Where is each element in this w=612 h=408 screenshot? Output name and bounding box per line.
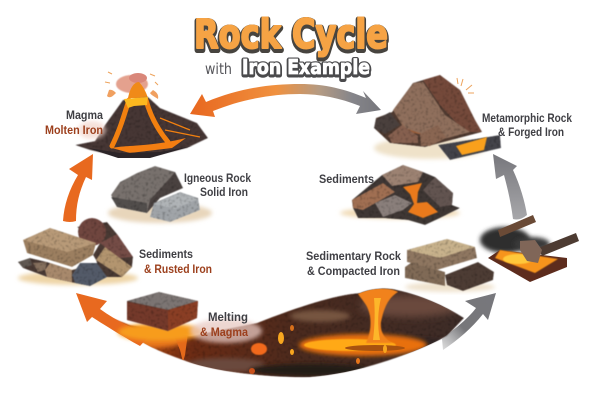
label: melting and magma — [190, 312, 262, 343]
label: magma, molten iron: Magma — [66, 110, 104, 122]
label: sediments and rusted iron — [139, 249, 212, 276]
illustration: lava mound — [112, 288, 464, 377]
illustration: metamorphic rock and forged iron — [374, 75, 501, 160]
arrow: bottom left, melting to sediments — [76, 293, 150, 346]
title: Rock Cycle — [194, 12, 388, 58]
label: metamorphic rock and forged iron: & Forged Iron — [498, 127, 564, 139]
label: igneous rock, solid iron: Solid Iron — [200, 187, 248, 199]
label: sedimentary rock and compacted iron — [306, 251, 402, 278]
illustration: igneous rock and iron ingot — [108, 166, 212, 223]
subtitle: Iron Example — [242, 56, 370, 80]
subtitle: Iron Example — [242, 55, 370, 79]
label: metamorphic rock and forged iron — [482, 113, 573, 139]
subtitle — [205, 55, 370, 80]
label: melting and magma: & Magma — [200, 327, 249, 339]
subtitle: with — [205, 60, 232, 78]
label: sedimentary rock and compacted iron: Sedimentary Rock — [306, 251, 402, 263]
arrow: left, sediments to magma — [63, 154, 93, 222]
label: sedimentary rock and compacted iron: & Compacted Iron — [307, 266, 400, 278]
label: sediments and rusted iron: Sediments — [139, 249, 193, 261]
illustration: sedimentary rock and compacted iron — [405, 239, 495, 292]
label: magma, molten iron — [45, 110, 106, 139]
illustration: sediments with iron fragments — [340, 165, 460, 225]
label: sediments: Sediments — [319, 174, 374, 186]
label: igneous rock, solid iron: Igneous Rock — [184, 173, 252, 185]
label: melting and magma: Melting — [208, 312, 248, 324]
arrow: top, metamorphic to magma — [190, 84, 381, 117]
label: sediments and rusted iron: & Rusted Iron — [144, 264, 212, 276]
label: metamorphic rock and forged iron: Metamorphic Rock — [482, 113, 573, 125]
illustration: sediments and rusted iron — [18, 218, 138, 286]
label: igneous rock, solid iron — [184, 173, 252, 199]
arrow: right, forge to metamorphic — [493, 154, 527, 220]
title: Rock Cycle — [194, 14, 388, 60]
illustration: melting iron block — [118, 292, 202, 341]
illustration: volcano — [75, 72, 208, 158]
label: magma, molten iron: Molten Iron — [45, 125, 103, 137]
illustration: forge with hammer and glowing iron — [480, 215, 579, 282]
arrow: bottom right, sedimentary rock — [442, 293, 496, 350]
